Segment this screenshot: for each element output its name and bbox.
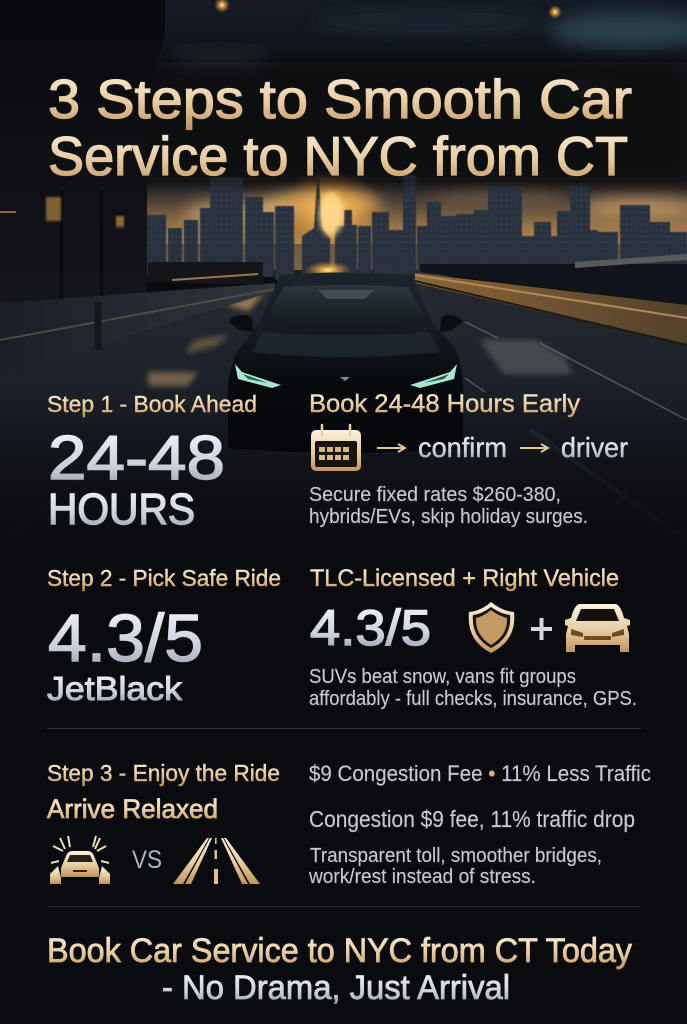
JetBlack label: JetBlack xyxy=(47,670,183,707)
step 2 description xyxy=(309,666,637,710)
step 3 right panel xyxy=(308,761,651,888)
car body xyxy=(228,272,463,453)
skyline xyxy=(146,163,687,280)
step 1 description: Secure fixed rates $260-380, xyxy=(309,484,561,506)
road reflections xyxy=(148,291,573,386)
step 2 subheading: TLC-Licensed + Right Vehicle xyxy=(310,565,619,592)
step 2 right panel xyxy=(309,565,637,710)
step 2 heading: Step 2 - Pick Safe Ride xyxy=(47,565,281,591)
rating 4.3/5: 4.3/5 xyxy=(310,600,431,656)
sun glow xyxy=(276,170,386,254)
title xyxy=(48,68,632,187)
mirrors xyxy=(229,315,253,332)
hood highlight xyxy=(252,332,440,357)
icon: car xyxy=(565,604,630,652)
icon: shield xyxy=(469,602,514,653)
left guardrail xyxy=(0,283,275,375)
big stat 24-48: 24-48 xyxy=(48,424,225,493)
step 3 description: work/rest instead of stress. xyxy=(308,866,536,888)
headlights xyxy=(235,364,457,388)
icon: traffic jam car xyxy=(50,836,110,884)
VS label: VS xyxy=(132,846,162,874)
confirm label: confirm xyxy=(418,432,507,463)
step 3 description: Transparent toll, smoother bridges, xyxy=(310,845,602,867)
step 2 description: affordably - full checks, insurance, GPS. xyxy=(309,688,637,710)
step 1 subheading: Book 24-48 Hours Early xyxy=(309,390,581,418)
step 2 description: SUVs beat snow, vans fit groups xyxy=(309,666,576,688)
horizon haze xyxy=(130,244,687,276)
arrow to driver xyxy=(520,444,548,452)
step 3 subheading: $9 Congestion Fee • 11% Less Traffic xyxy=(309,761,651,786)
title: Service to NYC from CT xyxy=(48,125,628,187)
call to action: Book Car Service to NYC from CT Today xyxy=(47,932,632,970)
icon: calendar xyxy=(311,425,361,471)
right guardrail xyxy=(415,273,687,345)
step 3 description xyxy=(308,845,602,888)
left building xyxy=(0,0,165,305)
sun core xyxy=(319,192,343,236)
road lane marks xyxy=(0,322,687,545)
star flares xyxy=(214,0,562,19)
steel bridge behind right rail xyxy=(420,264,687,305)
Arrive Relaxed label: Arrive Relaxed xyxy=(47,794,218,824)
call to action xyxy=(47,932,632,1007)
driver label: driver xyxy=(561,432,628,463)
badge xyxy=(340,377,350,381)
windshield xyxy=(262,285,430,328)
fade to dark xyxy=(0,400,687,570)
call to action: - No Drama, Just Arrival xyxy=(162,969,510,1007)
step 1 left panel xyxy=(47,391,257,534)
rearview mirror glare xyxy=(318,290,374,299)
arrow to confirm xyxy=(377,444,405,452)
plus sign xyxy=(531,618,552,640)
title backing xyxy=(0,62,687,180)
sky xyxy=(0,0,687,270)
big stat 4.3/5: 4.3/5 xyxy=(48,601,203,676)
icon: open road xyxy=(173,838,260,884)
clouds xyxy=(170,12,687,229)
horizon flare xyxy=(304,261,352,279)
step 2 left panel xyxy=(47,565,281,707)
step 1 description xyxy=(309,484,588,528)
step 3 left panel xyxy=(47,760,280,884)
step 3 heading: Step 3 - Enjoy the Ride xyxy=(47,760,280,786)
step 1 right panel xyxy=(309,390,628,528)
congestion fact: Congestion $9 fee, 11% traffic drop xyxy=(309,806,635,832)
title: 3 Steps to Smooth Car xyxy=(48,68,632,130)
step 1 description: hybrids/EVs, skip holiday surges. xyxy=(309,506,588,528)
HOURS label: HOURS xyxy=(48,485,195,534)
step 1 heading: Step 1 - Book Ahead xyxy=(47,391,257,417)
road surface xyxy=(0,272,687,640)
car xyxy=(228,272,463,453)
